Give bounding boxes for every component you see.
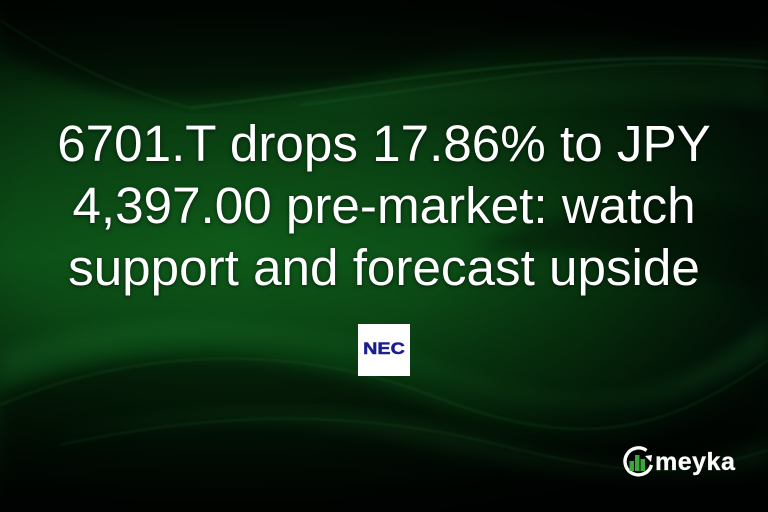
- title: support and forecast upside: [68, 239, 700, 296]
- title: 6701.T drops 17.86% to JPY: [57, 115, 711, 172]
- NEC logo: [358, 324, 410, 376]
- meyka logo: [623, 446, 736, 477]
- NEC logo: NEC: [363, 339, 405, 358]
- icon: meyka gauge with bars: [623, 446, 654, 477]
- title: 4,397.00 pre-market: watch: [72, 177, 696, 234]
- title: [57, 115, 711, 298]
- wordmark: meyka: [655, 448, 735, 476]
